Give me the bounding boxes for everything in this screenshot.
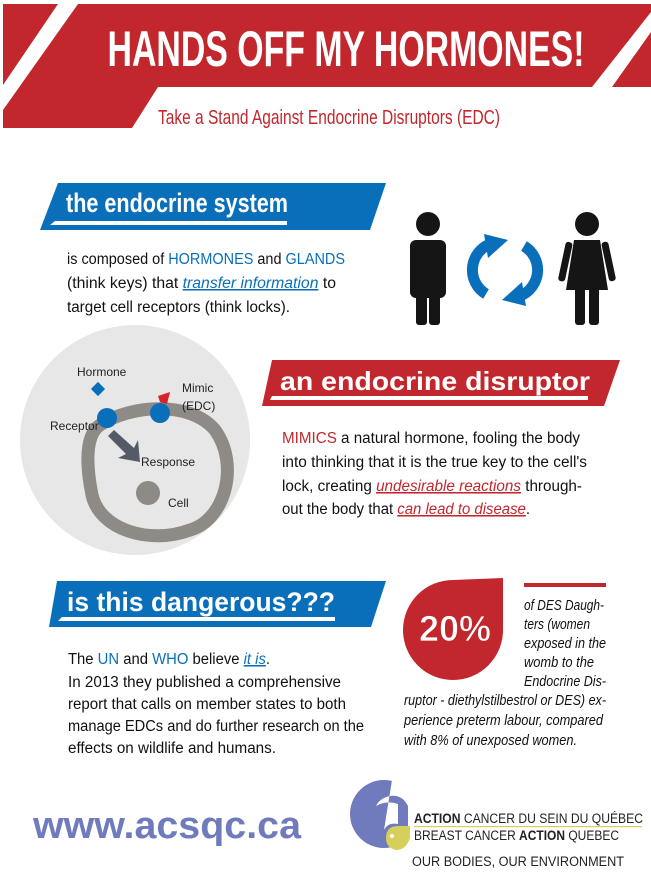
response arrow	[108, 430, 140, 462]
hormone key	[91, 382, 105, 396]
icon: man	[410, 212, 446, 325]
cell diagram: Hormone	[77, 365, 127, 379]
cell diagram: Cell	[168, 496, 189, 510]
text: dangerous: The UN and WHO believe it is.	[68, 651, 270, 668]
heading: an endocrine disruptor	[262, 360, 620, 406]
text: endocrine system: target cell receptors (think locks).	[67, 299, 290, 316]
stat text: perience preterm labour, compared	[403, 712, 604, 729]
cell diagram	[20, 325, 250, 555]
text: endocrine system: (think keys) that transfer information to	[67, 275, 336, 292]
text: disruptor: out the body that can lead to disease.	[282, 501, 530, 518]
stat text: Endocrine Dis-	[524, 673, 606, 690]
text: dangerous: effects on wildlife and humans.	[68, 740, 276, 757]
heading: is this dangerous	[49, 581, 386, 627]
text: dangerous: report that calls on member states to both	[68, 696, 346, 713]
logo: OUR BODIES, OUR ENVIRONMENT	[412, 854, 624, 869]
logo: BREAST CANCER ACTION QUEBEC	[414, 828, 619, 843]
receptors	[97, 408, 117, 428]
text: endocrine system: is composed of HORMONES and GLANDS	[67, 251, 345, 268]
text: dangerous: In 2013 they published a comprehensive	[68, 674, 341, 691]
text: dangerous	[68, 651, 364, 757]
cell diagram: Response	[141, 455, 195, 469]
stat text: with 8% of unexposed women.	[404, 732, 577, 749]
stat text: exposed in the	[524, 635, 606, 652]
stat drop 20%: 20%	[419, 608, 491, 649]
text: disruptor: lock, creating undesirable reactions through-	[282, 478, 582, 495]
stat drop 20%	[403, 578, 503, 680]
cell diagram: Mimic	[182, 381, 213, 395]
heading: the endocrine system: the endocrine system	[66, 188, 288, 218]
red rule	[524, 583, 606, 587]
text: endocrine system	[67, 251, 345, 316]
mimic key	[158, 392, 170, 404]
cell diagram: Receptor	[50, 419, 99, 433]
text: dangerous: manage EDCs and do further research on the	[68, 718, 364, 735]
subtitle: Take a Stand Against Endocrine Disruptors (EDC)	[158, 107, 500, 129]
header banner	[3, 4, 651, 128]
text: disruptor	[282, 430, 587, 518]
heading: an endocrine disruptor: an endocrine disruptor	[280, 366, 590, 396]
text: disruptor: into thinking that it is the true key to the cell's	[282, 454, 587, 471]
logo	[350, 780, 643, 869]
website url: www.acsqc.ca	[32, 805, 302, 847]
stat text: womb to the	[524, 654, 594, 671]
icon: rotate arrows	[472, 234, 538, 306]
text: disruptor: MIMICS a natural hormone, fooling the body	[282, 430, 580, 447]
stat text: ruptor - diethylstilbestrol or DES) ex-	[404, 692, 606, 709]
stat text: of DES Daugh-	[524, 597, 604, 614]
heading: is this dangerous: is this dangerous???	[67, 587, 335, 617]
stat text	[403, 597, 606, 749]
stat text: ters (women	[524, 616, 590, 633]
heading: the endocrine system	[40, 183, 386, 230]
icon: woman	[558, 212, 616, 325]
cell diagram: (EDC)	[182, 399, 215, 413]
